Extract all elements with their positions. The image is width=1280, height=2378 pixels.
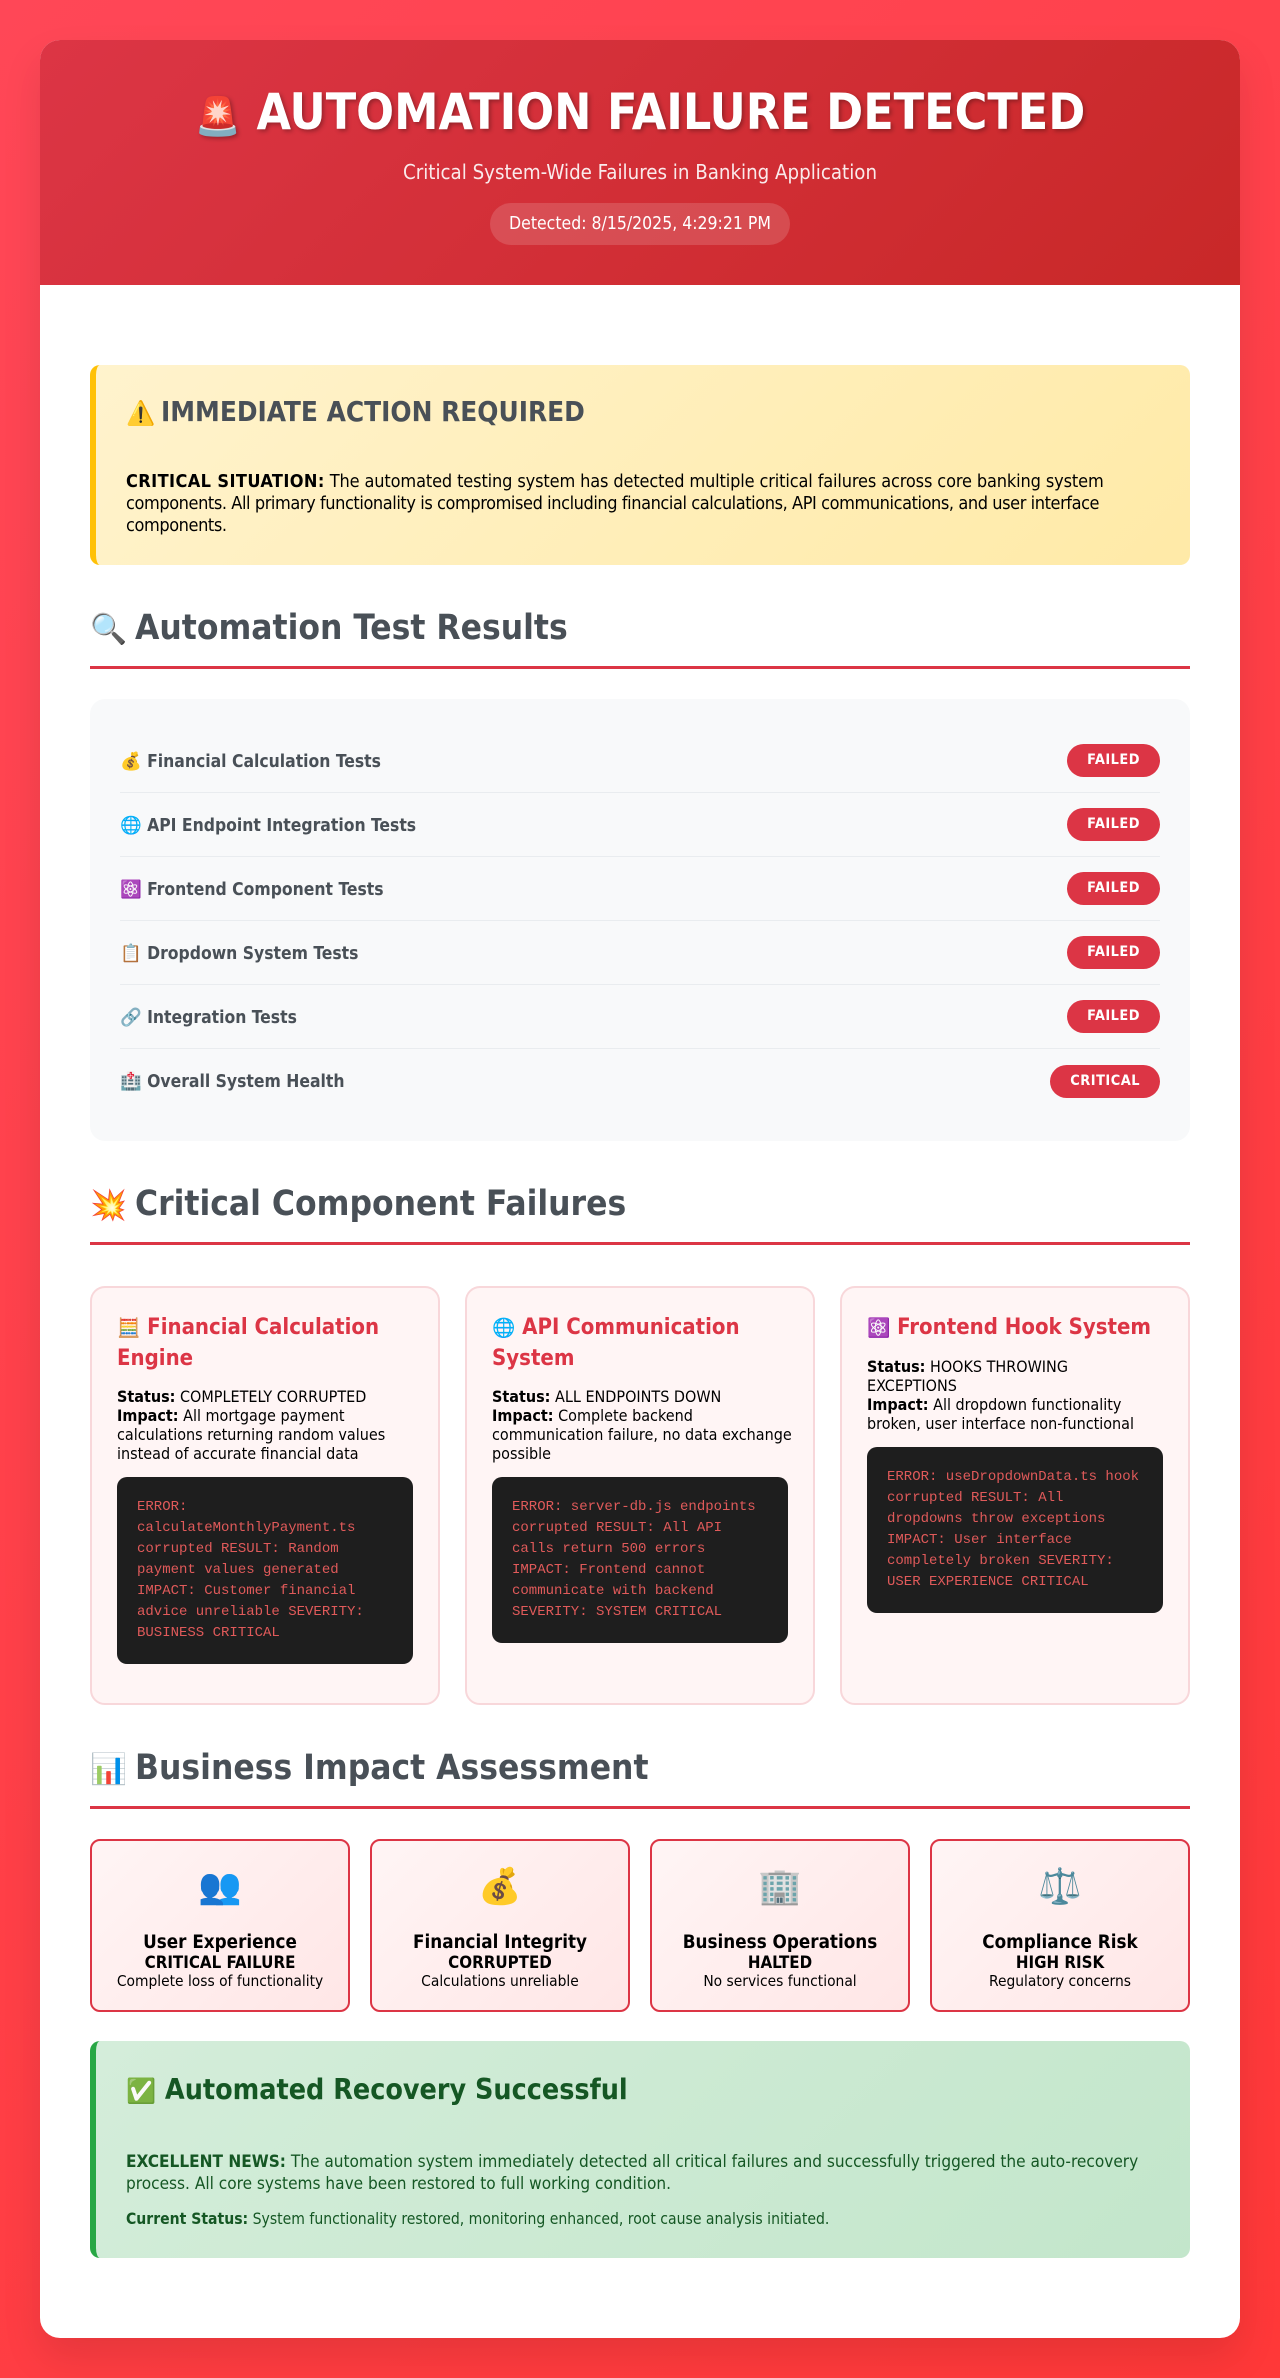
test row: dropdown (120, 921, 1160, 985)
error log (867, 1447, 1163, 1613)
recovery text: EXCELLENT NEWS: The automation system immediately detected all critical failures and successfully triggered the auto-recovery process. All core systems have been restored to full working condition. (126, 2152, 1138, 2194)
card text (867, 1357, 1134, 1433)
card: financial engine (90, 1286, 440, 1705)
card text: EXCEPTIONS (867, 1376, 957, 1395)
card heading: 🧮 Financial Calculation Engine (117, 1315, 379, 1371)
test row: overall health (120, 1065, 1160, 1098)
test row: dropdown: FAILED (1087, 944, 1140, 960)
card: API system (465, 1286, 815, 1705)
test row: API: FAILED (1087, 816, 1140, 832)
card text: instead of accurate financial data (117, 1444, 359, 1463)
panel: test results (90, 699, 1190, 1141)
card heading: 🌐 API Communication System (492, 1315, 740, 1371)
test row: overall health: 🏥 Overall System Health (120, 1072, 345, 1092)
card text: Impact: Complete backend (492, 1406, 693, 1425)
heading: component failures (90, 1181, 1190, 1245)
impact: financial integrity: CORRUPTED (448, 1952, 552, 1972)
test row: frontend (120, 857, 1160, 921)
recovery status: Current Status: System functionality restored, monitoring enhanced, root cause analysis initiated. (126, 2210, 829, 2228)
detection timestamp: Detected: 8/15/2025, 4:29:21 PM (509, 214, 771, 234)
heading: test results (90, 605, 1190, 669)
impact: financial integrity: Financial Integrity (413, 1932, 587, 1953)
impact: business operations: HALTED (748, 1952, 812, 1972)
alert heading: ⚠️ IMMEDIATE ACTION REQUIRED (126, 395, 585, 428)
impact: compliance: ⚖️ (1038, 1867, 1082, 1907)
test row: integration: 🔗 Integration Tests (120, 1008, 297, 1028)
impact: user experience: Complete loss of functionality (117, 1972, 323, 1990)
panel: immediate action alert (90, 365, 1190, 565)
heading: business impact (90, 1745, 1190, 1809)
panel: recovery (90, 2041, 1190, 2258)
impact: user experience: 👥 (198, 1867, 242, 1907)
error log: ERROR: useDropdownData.ts hook corrupted RESULT: All dropdowns throw exceptions IMPACT: User interface completely broken SEVERITY: USER EXPERIENCE CRITICAL (887, 1469, 1139, 1590)
card text: Status: ALL ENDPOINTS DOWN (492, 1387, 721, 1406)
impact: compliance: Regulatory concerns (989, 1972, 1131, 1990)
impact: compliance: HIGH RISK (1016, 1952, 1104, 1972)
alert text: components. (126, 515, 227, 536)
business impact grid (90, 1839, 1190, 2012)
card text (117, 1387, 385, 1463)
impact: financial integrity: 💰 (478, 1867, 522, 1907)
impact: user experience: CRITICAL FAILURE (145, 1952, 295, 1972)
error log: ERROR: calculateMonthlyPayment.ts corrupted RESULT: Random payment values generated IMPACT: Customer financial advice unreliable SEVERITY: BUSINESS CRITICAL (137, 1499, 364, 1641)
alert text: CRITICAL SITUATION: The automated testing system has detected multiple critical failures across core banking system (126, 471, 1104, 492)
card text: broken, user interface non-functional (867, 1414, 1134, 1433)
test row: financial: FAILED (1087, 752, 1140, 768)
impact: business operations: 🏢 (758, 1867, 802, 1907)
impact: business operations (650, 1839, 910, 2012)
error log: ERROR: server-db.js endpoints corrupted RESULT: All API calls return 500 errors IMPACT: Frontend cannot communicate with backend SEVERITY: SYSTEM CRITICAL (512, 1499, 756, 1620)
subtitle: Critical System-Wide Failures in Banking Application (403, 160, 877, 184)
detection timestamp (490, 203, 790, 245)
error log (492, 1477, 788, 1643)
error log (117, 1477, 413, 1664)
card text: calculations returning random values (117, 1425, 385, 1444)
test row: financial (120, 729, 1160, 793)
card text: Status: HOOKS THROWING (867, 1357, 1068, 1376)
impact: compliance (930, 1839, 1190, 2012)
test row: overall health: CRITICAL (1070, 1072, 1140, 1088)
heading: test results: 🔍 Automation Test Results (90, 608, 568, 648)
impact: user experience: User Experience (143, 1932, 297, 1953)
alert text: components. All primary functionality is compromised including financial calculations, API communications, and user interface (126, 493, 1099, 514)
card text: Status: COMPLETELY CORRUPTED (117, 1387, 366, 1406)
card text: Impact: All dropdown functionality (867, 1395, 1121, 1414)
impact: compliance: Compliance Risk (982, 1932, 1138, 1953)
impact: financial integrity: Calculations unreliable (421, 1972, 579, 1990)
impact: financial integrity (370, 1839, 630, 2012)
card heading: ⚛️ Frontend Hook System (867, 1315, 1151, 1340)
test row: dropdown: 📋 Dropdown System Tests (120, 944, 358, 964)
component failure cards (90, 1286, 1190, 1705)
title: 🚨 AUTOMATION FAILURE DETECTED (195, 83, 1085, 141)
card text (492, 1387, 792, 1463)
test row: API: 🌐 API Endpoint Integration Tests (120, 816, 416, 836)
content (90, 365, 1190, 2258)
heading: component failures: 💥 Critical Component Failures (90, 1184, 626, 1224)
test row: integration (120, 985, 1160, 1049)
impact: user experience (90, 1839, 350, 2012)
test row: integration: FAILED (1087, 1008, 1140, 1024)
alert text (126, 471, 1104, 536)
impact: business operations: No services functional (703, 1972, 857, 1990)
test row: API (120, 793, 1160, 857)
test row: frontend: ⚛️ Frontend Component Tests (120, 880, 384, 900)
card text: possible (492, 1444, 551, 1463)
card text: Impact: All mortgage payment (117, 1406, 345, 1425)
test row: financial: 💰 Financial Calculation Tests (120, 752, 381, 772)
recovery heading: ✅ Automated Recovery Successful (126, 2073, 628, 2106)
header banner (40, 40, 1240, 285)
card: frontend hooks (840, 1286, 1190, 1705)
impact: business operations: Business Operations (683, 1932, 877, 1953)
heading: business impact: 📊 Business Impact Assessment (90, 1748, 649, 1788)
card text: communication failure, no data exchange (492, 1425, 792, 1444)
test row: frontend: FAILED (1087, 880, 1140, 896)
